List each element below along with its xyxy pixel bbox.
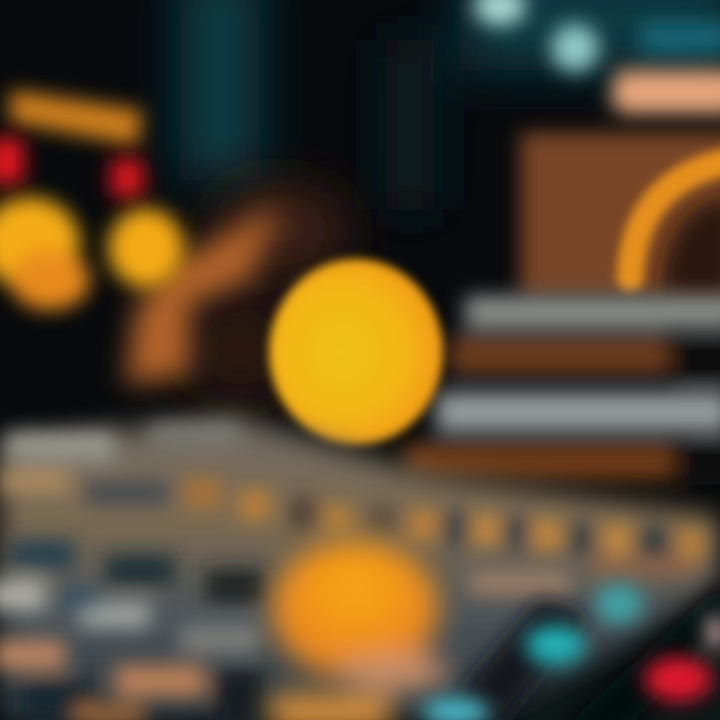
brown connector shape bbox=[125, 205, 280, 385]
left orange bar bbox=[10, 90, 142, 146]
orange arch bbox=[630, 160, 720, 278]
red lights bbox=[0, 138, 144, 198]
background: upper teal haze bbox=[180, 0, 720, 210]
teal and red buttons bbox=[422, 584, 720, 720]
left yellow blobs bbox=[0, 197, 184, 310]
right-hand stripes bbox=[405, 296, 720, 485]
orange reflection bbox=[270, 540, 450, 720]
warm haze around the circle bbox=[180, 185, 350, 405]
dark arch opening bbox=[662, 195, 720, 300]
top-right lights bbox=[474, 0, 720, 72]
peach bar bbox=[612, 70, 720, 114]
console dark strip bbox=[450, 585, 720, 720]
brown arch block bbox=[520, 132, 720, 300]
mosaic floor base bbox=[0, 415, 720, 720]
large yellow circle bbox=[269, 259, 443, 445]
mosaic floor tiles bbox=[0, 425, 704, 720]
